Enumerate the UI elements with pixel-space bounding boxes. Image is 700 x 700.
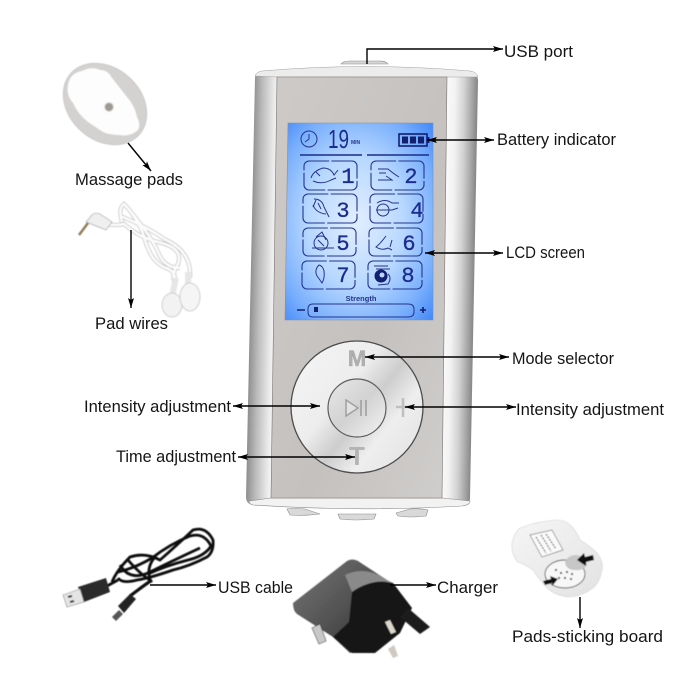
T button: T: [349, 441, 365, 471]
plus button: [396, 398, 410, 417]
pad outline: [545, 560, 585, 588]
metal casing: [246, 66, 478, 509]
arrow: mode selector: [365, 356, 509, 358]
bottom buttons: [287, 508, 428, 520]
play pause button: [328, 379, 386, 437]
plug prongs: [400, 608, 430, 634]
mode 7: 7: [336, 264, 350, 289]
M button: M: [348, 346, 366, 371]
pad wires: [79, 204, 200, 317]
icon: battery: [399, 134, 430, 146]
label: USB port: USB port: [504, 42, 573, 61]
face panel: [271, 77, 447, 498]
pads sticking board: [512, 520, 602, 597]
device body: [246, 61, 478, 520]
arrow: USB cable: [150, 584, 216, 586]
arrow: charger: [390, 584, 436, 586]
arrow: massage pads: [128, 143, 151, 171]
mode 8: [368, 261, 422, 289]
arrow: left intensity: [233, 405, 320, 407]
mode 5: 5: [336, 232, 350, 257]
mode 8: 8: [401, 264, 415, 289]
label: massage pads: Massage pads: [75, 170, 183, 189]
strength bar: [297, 304, 426, 317]
label: LCD screen: LCD screen: [506, 243, 585, 262]
icon: clock: [301, 131, 317, 147]
bottom cap: [249, 498, 470, 509]
arrow: time adjustment: [238, 456, 355, 458]
mode 5: [303, 228, 356, 257]
earbuds: [172, 272, 188, 296]
strength label: Strength: [346, 294, 377, 303]
mode 2: 2: [404, 165, 418, 190]
mode 4: 4: [410, 199, 424, 224]
massage pad: [47, 46, 163, 162]
audio jack: [86, 213, 112, 230]
arrow: LCD screen: [425, 252, 503, 254]
LCD screen: [285, 123, 433, 320]
arrow: pad wires: [130, 230, 132, 308]
label: USB cable: USB cable: [218, 578, 293, 597]
USB cable: [63, 529, 213, 621]
mode 4: [370, 194, 424, 224]
label: battery indicator: Battery indicator: [497, 130, 616, 149]
label: right intensity: Intensity adjustment: [516, 400, 664, 419]
top cap: [255, 66, 478, 77]
label: sticking board: Pads-sticking board: [512, 627, 663, 646]
minute unit: MIN: [351, 140, 361, 146]
arrow: battery indicator: [427, 139, 494, 141]
mode 7: [302, 261, 355, 289]
label: time adjustment: Time adjustment: [116, 447, 236, 466]
mode 3: 3: [336, 199, 350, 224]
mini plug: [118, 594, 136, 613]
mode 2: [371, 161, 424, 190]
USB port button: [341, 61, 388, 64]
control wheel: [291, 341, 423, 473]
arrow: right intensity: [405, 406, 516, 408]
timer readout: 19: [328, 124, 349, 154]
mode 6: 6: [402, 232, 416, 257]
charger: [293, 560, 430, 658]
label: left intensity: Intensity adjustment: [84, 397, 231, 416]
label: pad wires: Pad wires: [95, 314, 168, 333]
USB plug: [78, 578, 110, 602]
label: mode selector: Mode selector: [512, 349, 614, 368]
arrow: USB port: [367, 49, 503, 64]
label: charger: Charger: [437, 578, 498, 597]
mode 1: 1: [341, 165, 355, 190]
instruction label: [530, 530, 563, 557]
mode 1: [304, 161, 357, 190]
mode 6: [369, 228, 422, 257]
arrow: sticking board: [579, 597, 581, 628]
press arrows: [577, 553, 594, 566]
mode 3: [303, 194, 357, 224]
